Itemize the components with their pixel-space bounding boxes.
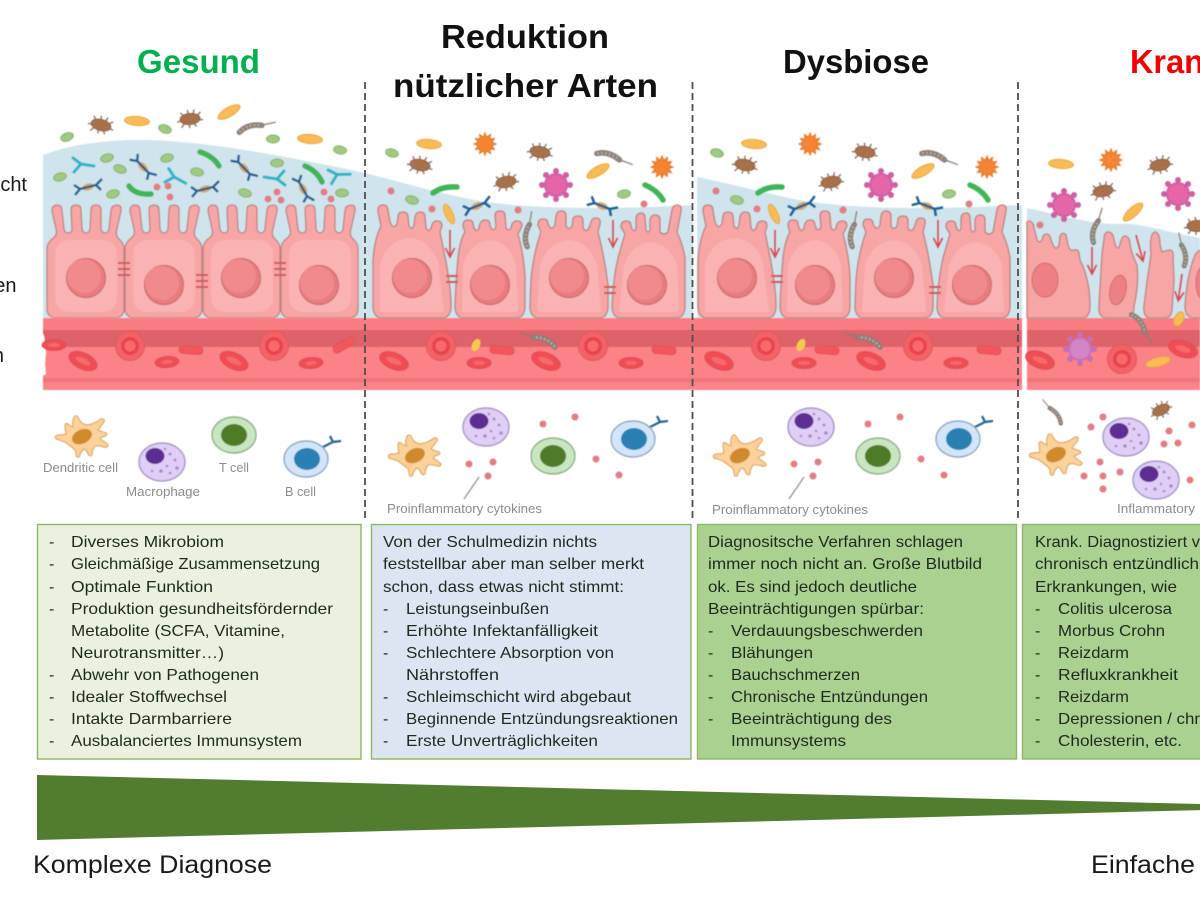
text box: Dysbiose: - — [708, 711, 713, 728]
panel: sick gut illustration — [1023, 149, 1200, 374]
title: Dysbiose: Dysbiose — [783, 43, 929, 80]
text box: Gesund: Ausbalanciertes Immunsystem — [71, 733, 302, 750]
panel: healthy gut illustration — [43, 102, 365, 318]
text box: Reduktion nützlicher Arten: Schlechtere Absorption von — [406, 645, 614, 662]
text box: Krank: Refluxkrankheit — [1058, 667, 1179, 684]
panel: reduced species illustration — [373, 133, 685, 499]
left edge labels: cht — [0, 174, 27, 196]
text box: Gesund: Gleichmäßige Zusammensetzung — [71, 556, 320, 573]
text box: Gesund: Neurotransmitter…) — [71, 645, 224, 662]
text box: Dysbiose: - — [708, 689, 713, 706]
text box: Reduktion nützlicher Arten — [372, 524, 691, 759]
immune cell labels: healthy: T cell — [219, 461, 249, 475]
text box: Gesund: - — [49, 556, 54, 573]
text box: Gesund: - — [49, 667, 54, 684]
text box: Krank: chronisch entzündlich — [1035, 556, 1199, 573]
text box: Reduktion nützlicher Arten: Leistungseinbußen — [406, 601, 549, 618]
text box: Reduktion nützlicher Arten: - — [383, 645, 388, 662]
text box: Dysbiose: Beeinträchtigung des — [731, 711, 892, 728]
text box: Dysbiose: Chronische Entzündungen — [731, 689, 928, 706]
text box: Reduktion nützlicher Arten: feststellbar aber man selber merkt — [383, 556, 645, 573]
text box: Reduktion nützlicher Arten: - — [383, 711, 388, 728]
text box: Krank — [1022, 524, 1200, 759]
text box: Krank: Reizdarm — [1058, 689, 1129, 706]
text box: Dysbiose — [698, 524, 1016, 759]
text box: Reduktion nützlicher Arten: Schleimschicht wird abgebaut — [406, 689, 632, 706]
blood vessel — [42, 318, 1200, 390]
text box: Gesund: Optimale Funktion — [71, 579, 213, 596]
panel: sick gut layer background — [1027, 208, 1200, 318]
dashed separator 3 — [1017, 82, 1019, 518]
label: Einfache: Einfache — [1091, 851, 1195, 879]
text box: Dysbiose: immer noch nicht an. Große Blutbild — [708, 556, 982, 573]
text box: Reduktion nützlicher Arten: Erste Unverträglichkeiten — [406, 733, 598, 750]
immune cells: sick — [1029, 398, 1200, 499]
panel: reduced species gut layer background — [365, 173, 693, 318]
text box: Reduktion nützlicher Arten: - — [383, 601, 388, 618]
text box: Dysbiose: - — [708, 645, 713, 662]
text box: Dysbiose: - — [708, 623, 713, 640]
text box: Gesund: Diverses Mikrobiom — [71, 534, 224, 551]
text box: Dysbiose: Beeinträchtigungen spürbar: — [708, 601, 924, 618]
text box: Gesund: - — [49, 601, 54, 618]
text box: Krank: Reizdarm — [1058, 645, 1129, 662]
title: Reduktion nützlicher Arten — [393, 18, 658, 104]
text box: Gesund: Produktion gesundheitsfördernder — [71, 601, 334, 618]
text box: Krank: Krank. Diagnostiziert v — [1035, 534, 1200, 551]
text box: Gesund: - — [49, 579, 54, 596]
text box: Krank: - — [1035, 601, 1040, 618]
text box: Dysbiose: Bauchschmerzen — [731, 667, 860, 684]
immune cell labels: healthy — [43, 461, 316, 499]
text box: Reduktion nützlicher Arten: Erhöhte Infektanfälligkeit — [406, 623, 599, 640]
text box: Gesund: - — [49, 711, 54, 728]
text box: Gesund: Metabolite (SCFA, Vitamine, — [71, 623, 285, 640]
label: inflammatory: Inflammatory — [1117, 502, 1196, 516]
diagnosis wedge — [37, 775, 1200, 840]
text box: Reduktion nützlicher Arten: Nährstoffen — [406, 667, 499, 684]
title: Gesund: Gesund — [137, 43, 260, 80]
text box: Reduktion nützlicher Arten: - — [383, 733, 388, 750]
text box: Dysbiose: ok. Es sind jedoch deutliche — [708, 579, 917, 596]
text box: Gesund: Abwehr von Pathogenen — [71, 667, 259, 684]
immune cell labels: healthy: Macrophage — [126, 485, 200, 499]
immune cells: healthy — [55, 416, 341, 481]
panel: dysbiosis gut layer background — [697, 177, 1022, 318]
text box: Gesund: Intakte Darmbarriere — [71, 711, 232, 728]
dashed separator 1 — [364, 82, 366, 518]
text box: Gesund: - — [49, 689, 54, 706]
text box: Krank: Cholesterin, etc. — [1058, 733, 1182, 750]
text box: Dysbiose: Diagnositsche Verfahren schlagen — [708, 534, 963, 551]
title: Reduktion nützlicher Arten: nützlicher Arten — [393, 67, 658, 104]
text box: Reduktion nützlicher Arten: - — [383, 623, 388, 640]
text box: Reduktion nützlicher Arten: - — [383, 689, 388, 706]
immune cell labels: healthy: Dendritic cell — [43, 461, 118, 475]
text box: Gesund: - — [49, 534, 54, 551]
dashed separator 2 — [692, 82, 694, 518]
label: proinflammatory cytokines, panel 2: Proinflammatory cytokines — [387, 502, 542, 516]
text box: Reduktion nützlicher Arten: schon, dass etwas nicht stimmt: — [383, 579, 624, 596]
text box: Reduktion nützlicher Arten: Beginnende Entzündungsreaktionen — [406, 711, 678, 728]
label: proinflammatory cytokines, panel 3: Proinflammatory cytokines — [712, 503, 868, 517]
text box: Krank: Colitis ulcerosa — [1058, 601, 1172, 618]
text box: Krank: - — [1035, 733, 1040, 750]
text box: Dysbiose: Blähungen — [731, 645, 813, 662]
text box: Dysbiose: Verdauungsbeschwerden — [731, 623, 923, 640]
panel: dysbiosis illustration — [698, 133, 1010, 499]
text box: Gesund: Idealer Stoffwechsel — [71, 689, 227, 706]
text box: Gesund: - — [49, 733, 54, 750]
text box: Krank: - — [1035, 623, 1040, 640]
text box: Dysbiose: - — [708, 667, 713, 684]
text box: Dysbiose: Immunsystems — [731, 733, 846, 750]
immune cell labels: healthy: B cell — [285, 485, 316, 499]
text box: Krank: - — [1035, 667, 1040, 684]
text box: Krank: - — [1035, 689, 1040, 706]
text box: Krank: - — [1035, 711, 1040, 728]
text box: Reduktion nützlicher Arten: Von der Schulmedizin nichts — [383, 534, 597, 551]
label: Komplexe Diagnose: Komplexe Diagnose — [33, 851, 272, 879]
text box: Krank: - — [1035, 645, 1040, 662]
text box: Krank: Morbus Crohn — [1058, 623, 1165, 640]
text box: Krank: Depressionen / chr — [1058, 711, 1200, 728]
text box: Krank: Erkrankungen, wie — [1035, 579, 1177, 596]
left edge labels — [0, 174, 27, 367]
title: Reduktion nützlicher Arten: Reduktion — [441, 18, 609, 55]
text box: Gesund — [38, 524, 361, 759]
